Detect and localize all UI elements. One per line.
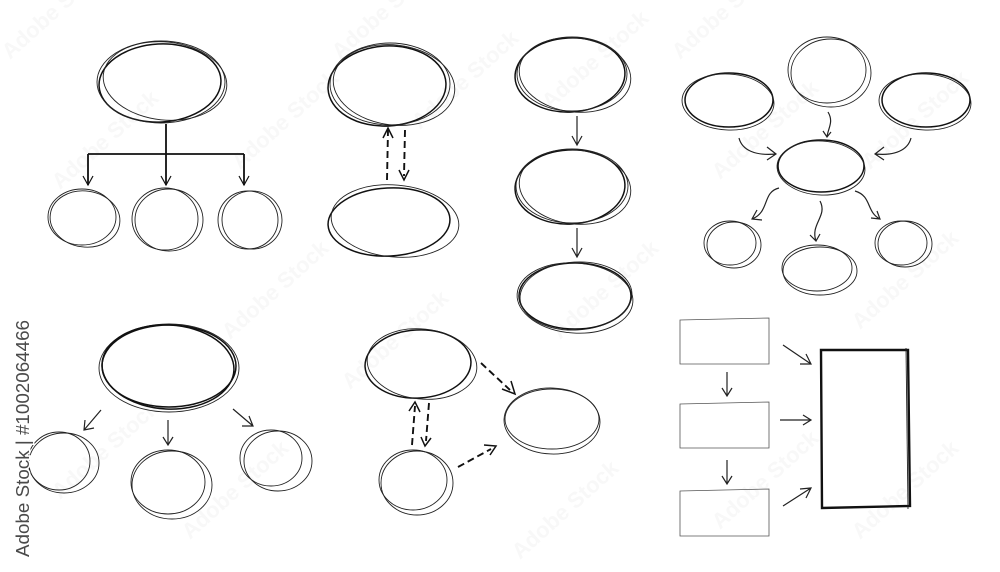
- connector arrows: [83, 124, 249, 185]
- watermark pattern: Adobe Stock: [847, 225, 964, 334]
- watermark pattern: Adobe Stock: [707, 425, 824, 534]
- curved arrows: [739, 112, 911, 241]
- oval: right child: [217, 186, 287, 254]
- watermark pattern: Adobe Stock: [217, 235, 334, 344]
- oval: top: [363, 323, 480, 405]
- oval: middle child: [131, 450, 212, 519]
- oval: left output: [704, 221, 761, 268]
- diagram: hub with inputs and outputs: [681, 37, 972, 295]
- oval: top: [97, 36, 231, 126]
- watermark pattern: Adobe Stock: [177, 435, 294, 544]
- arrows: [84, 409, 253, 445]
- dashed arrows: [383, 128, 409, 180]
- oval: right: [503, 386, 601, 456]
- diagram: one to three tree: [46, 36, 287, 254]
- oval: bottom: [326, 180, 462, 262]
- watermark pattern: Adobe Stock: [707, 75, 824, 184]
- arrow: [572, 116, 582, 145]
- oval: right input: [878, 72, 972, 132]
- arrow: [572, 228, 582, 257]
- oval: middle child: [132, 188, 203, 251]
- watermark pattern: Adobe Stock: [547, 235, 664, 344]
- watermark pattern: Adobe Stock: [857, 65, 974, 174]
- oval: top: [99, 322, 239, 412]
- oval: right output: [875, 221, 932, 267]
- box: second: [680, 402, 769, 448]
- oval: middle output: [782, 245, 857, 295]
- watermark pattern: Adobe Stock: [47, 85, 164, 194]
- oval: top: [326, 38, 459, 132]
- watermark pattern: Adobe Stock: [537, 5, 654, 114]
- oval: top input: [788, 37, 871, 107]
- vertical stock caption: Adobe Stock | #1002064466: [13, 320, 33, 557]
- oval: left child: [28, 432, 99, 493]
- box: third: [680, 489, 769, 536]
- oval: hub: [776, 139, 866, 197]
- box: first: [680, 318, 769, 364]
- watermark pattern: Adobe Stock: [407, 25, 524, 134]
- dashed arrows: [409, 363, 515, 467]
- oval: left child: [46, 186, 124, 252]
- diagram: flow boxes into tall box: [680, 318, 910, 536]
- watermark pattern: Adobe Stock: [337, 285, 454, 394]
- diagram: vertical chain of three ovals: [513, 31, 635, 337]
- oval: third: [515, 259, 635, 337]
- diagram: two ovals with dashed arrows: [326, 38, 462, 262]
- watermark pattern: Adobe Stock: [507, 455, 624, 564]
- oval: bottom: [379, 450, 453, 515]
- oval: first: [513, 31, 635, 119]
- watermark pattern: Adobe Stock: [847, 435, 964, 544]
- diagram: three ovals with dashed arrows: [363, 323, 601, 515]
- diagram: large oval with three children: [28, 322, 312, 519]
- box: tall result: [821, 348, 910, 509]
- oval: right child: [240, 430, 312, 491]
- oval: left input: [681, 72, 775, 132]
- arrows: [722, 345, 811, 506]
- watermark pattern: Adobe Stock: [227, 65, 344, 174]
- oval: second: [513, 143, 635, 231]
- watermark pattern: Adobe Stock: [47, 395, 164, 504]
